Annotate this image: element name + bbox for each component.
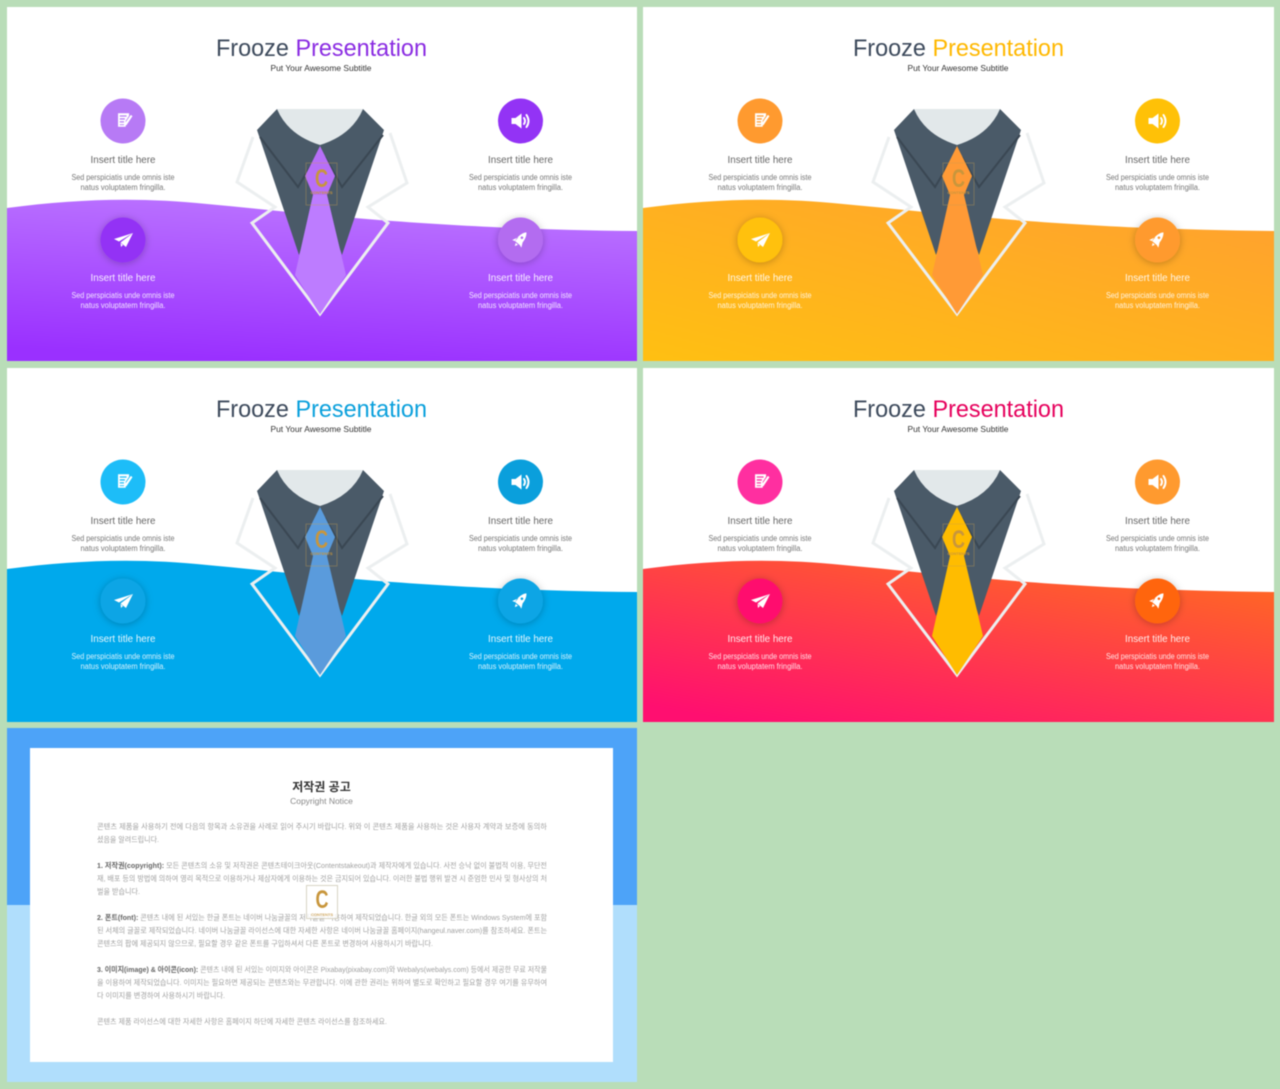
item: bottom left <box>708 218 812 310</box>
item: bottom right: natus voluptatem fringilla. <box>1115 662 1200 671</box>
item: bottom right <box>1106 578 1209 671</box>
item: top left <box>708 460 812 553</box>
item: top right <box>469 98 572 192</box>
item: top left: natus voluptatem fringilla. <box>80 183 166 192</box>
section 3: image and icon: 3. 이미지(image) & 아이콘(icon): 콘텐츠 내에 된 서있는 이미지와 아이콘은 Pixabay(pixabay.com)와 Webalys(webalys.com) 등에서 제공한 무료 저작물 <box>97 964 547 974</box>
suit illustration <box>237 470 407 675</box>
intro paragraph <box>97 821 547 844</box>
slide background <box>7 7 637 361</box>
slide background <box>7 368 637 722</box>
suit illustration: C <box>315 526 328 554</box>
item: top right <box>1106 460 1209 553</box>
suit illustration <box>237 109 407 314</box>
section 3: image and icon: 다 이미지를 변경하여 사용하시기 바랍니다. <box>97 990 225 1000</box>
item: top right <box>469 460 572 553</box>
suit illustration <box>873 109 1044 314</box>
item: bottom right <box>469 578 572 671</box>
item: bottom left: Insert title here <box>728 634 793 645</box>
wave <box>7 200 637 361</box>
item: top right: Insert title here <box>1125 516 1190 527</box>
suit illustration: C <box>952 526 965 554</box>
item: bottom right: Sed perspiciatis unde omnis iste <box>1106 652 1209 661</box>
item: top left: Insert title here <box>90 155 156 166</box>
item: bottom left: natus voluptatem fringilla. <box>80 301 166 310</box>
item: bottom left: natus voluptatem fringilla. <box>80 662 166 671</box>
background lower band <box>7 905 637 1082</box>
item: top right: Insert title here <box>1125 155 1190 166</box>
notice subheading: Copyright Notice <box>290 796 353 806</box>
section 2: font: 콘텐츠의 팝에 제공되지 않으므로, 필요할 경우 같은 폰트를 구입하셔서 다른 폰트로 변경하여 사용하시기 바랍니다. <box>97 938 433 948</box>
item: top left: Insert title here <box>728 155 793 166</box>
item: top left: Sed perspiciatis unde omnis iste <box>72 534 175 543</box>
item: bottom right <box>1106 218 1209 310</box>
item: top right: natus voluptatem fringilla. <box>1115 544 1200 553</box>
intro paragraph: 콘텐츠 제품을 사용하기 전에 다음의 항목과 소유권을 사례로 읽어 주시기 바랍니다. 위와 이 콘텐츠 제품을 사용하는 것은 사용자 계약과 보증에 동의하 <box>97 821 547 831</box>
item: top right: natus voluptatem fringilla. <box>478 544 563 553</box>
item: bottom right: Insert title here <box>488 273 553 284</box>
item: top right <box>1106 98 1209 192</box>
item: top right: Sed perspiciatis unde omnis iste <box>1106 534 1209 543</box>
subtitle: Put Your Awesome Subtitle <box>270 424 372 434</box>
section 1: copyright: 1. 저작권(copyright): 모든 콘텐츠의 소유 및 저작권은 콘텐츠테이크아웃(Contentstakeout)과 제작자에게 있습니다. 사전 승낙 없이 불법적 이용, 무단전 <box>97 860 547 870</box>
suit illustration: C <box>315 165 328 193</box>
suit illustration: C <box>952 165 965 193</box>
item: top left: natus voluptatem fringilla. <box>80 544 166 553</box>
item: bottom right: Sed perspiciatis unde omnis iste <box>1106 291 1209 300</box>
intro paragraph: 셨음을 알려드립니다. <box>97 834 159 844</box>
item: bottom left: natus voluptatem fringilla. <box>718 662 802 671</box>
item: top left: Sed perspiciatis unde omnis iste <box>708 534 812 543</box>
item: top left: natus voluptatem fringilla. <box>718 544 802 553</box>
wave <box>7 561 637 722</box>
section 1: copyright: 벌을 받습니다. <box>97 886 140 896</box>
item: bottom left <box>72 578 175 671</box>
item: top right: Insert title here <box>488 516 553 527</box>
item: bottom right: natus voluptatem fringilla. <box>478 662 563 671</box>
item: bottom left: Sed perspiciatis unde omnis iste <box>72 652 175 661</box>
heading: Frooze Presentation <box>853 396 1064 423</box>
item: bottom right <box>469 218 572 310</box>
heading: Frooze Presentation <box>216 396 427 423</box>
watermark logo <box>306 886 338 918</box>
item: top left <box>708 98 812 192</box>
notice heading: 저작권 공고 <box>292 779 351 794</box>
panel: blue slide <box>7 368 637 722</box>
wave <box>643 561 1274 722</box>
item: top left <box>72 98 175 192</box>
item: bottom left: Sed perspiciatis unde omnis iste <box>708 652 812 661</box>
item: bottom right: Insert title here <box>488 634 553 645</box>
suit illustration: CONTENTS <box>948 190 970 195</box>
item: top right: Insert title here <box>488 155 553 166</box>
section 3: image and icon: 을 이용하여 제작되었습니다. 이미지는 필요하면 제공되는 콘텐츠와는 무관합니다. 이에 관한 권리는 위하여 별도로 확인하고 필요할 경우 여기를 유무하여 <box>97 977 547 987</box>
section 1: copyright <box>97 860 547 896</box>
section 2: font <box>97 912 547 948</box>
item: top right: Sed perspiciatis unde omnis iste <box>469 534 572 543</box>
item: top right: natus voluptatem fringilla. <box>478 183 563 192</box>
item: bottom left: Sed perspiciatis unde omnis iste <box>708 291 812 300</box>
closing line: 콘텐츠 제품 라이선스에 대한 자세한 사항은 홈페이지 하단에 자세한 콘텐츠 라이선스를 참조하세요. <box>97 1016 387 1026</box>
item: top right: Sed perspiciatis unde omnis iste <box>1106 173 1209 182</box>
item: bottom right: natus voluptatem fringilla. <box>478 301 563 310</box>
subtitle: Put Your Awesome Subtitle <box>908 63 1009 73</box>
section 2: font: 된 서체의 글꼴로 제작되었습니다. 네이버 나눔글꼴 라이선스에 대한 자세한 사항은 네이버 나눔글꼴 홈페이지(hangeul.naver.com)를 참조하세요. 폰트는 <box>97 925 547 935</box>
item: bottom left: Insert title here <box>90 273 156 284</box>
background upper band <box>7 728 637 905</box>
item: top left: natus voluptatem fringilla. <box>718 183 802 192</box>
slide background <box>643 7 1274 361</box>
item: bottom left: Insert title here <box>90 634 156 645</box>
subtitle: Put Your Awesome Subtitle <box>908 424 1009 434</box>
item: top right: natus voluptatem fringilla. <box>1115 183 1200 192</box>
wave <box>643 200 1274 361</box>
heading: Frooze Presentation <box>216 35 427 62</box>
item: top left: Sed perspiciatis unde omnis iste <box>72 173 175 182</box>
item: bottom right: Insert title here <box>1125 273 1190 284</box>
item: bottom right: natus voluptatem fringilla. <box>1115 301 1200 310</box>
section 2: font: 2. 폰트(font): 콘텐츠 내에 된 서있는 한글 폰트는 네이버 나눔글꼴의 저작물을 이용하여 제작되었습니다. 한글 외의 모든 폰트는 Windows System에 포함 <box>97 912 547 922</box>
suit illustration <box>873 470 1044 675</box>
panel: purple slide <box>7 7 637 361</box>
item: bottom left <box>708 578 812 671</box>
panel: orange slide <box>643 7 1274 361</box>
item: bottom left: Insert title here <box>728 273 793 284</box>
item: top left: Sed perspiciatis unde omnis iste <box>708 173 812 182</box>
item: top right: Sed perspiciatis unde omnis iste <box>469 173 572 182</box>
white notice card <box>30 748 613 1062</box>
item: top left <box>72 460 175 553</box>
item: bottom left <box>72 218 175 310</box>
suit illustration: CONTENTS <box>310 190 333 195</box>
item: bottom left: Sed perspiciatis unde omnis iste <box>72 291 175 300</box>
item: top left: Insert title here <box>728 516 793 527</box>
panel: red slide <box>643 368 1274 722</box>
item: bottom right: Sed perspiciatis unde omnis iste <box>469 291 572 300</box>
suit illustration: CONTENTS <box>948 551 970 556</box>
panel: copyright notice slide <box>7 728 637 1082</box>
item: bottom right: Insert title here <box>1125 634 1190 645</box>
heading: Frooze Presentation <box>853 35 1064 62</box>
watermark logo: CONTENTS <box>311 912 333 917</box>
slide background <box>643 368 1274 722</box>
subtitle: Put Your Awesome Subtitle <box>270 63 372 73</box>
watermark logo: C <box>316 886 328 914</box>
suit illustration: CONTENTS <box>310 551 333 556</box>
item: top left: Insert title here <box>90 516 156 527</box>
item: bottom right: Sed perspiciatis unde omnis iste <box>469 652 572 661</box>
section 1: copyright: 재, 배포 등의 방법에 의하여 영리 목적으로 이용하거나 제삼자에게 이용하는 것은 금지되어 있습니다. 이러한 불법 행위 발견 시 준엄한 민사 및 형사상의 처 <box>97 873 547 883</box>
item: bottom left: natus voluptatem fringilla. <box>718 301 802 310</box>
section 3: image and icon <box>97 964 547 1000</box>
